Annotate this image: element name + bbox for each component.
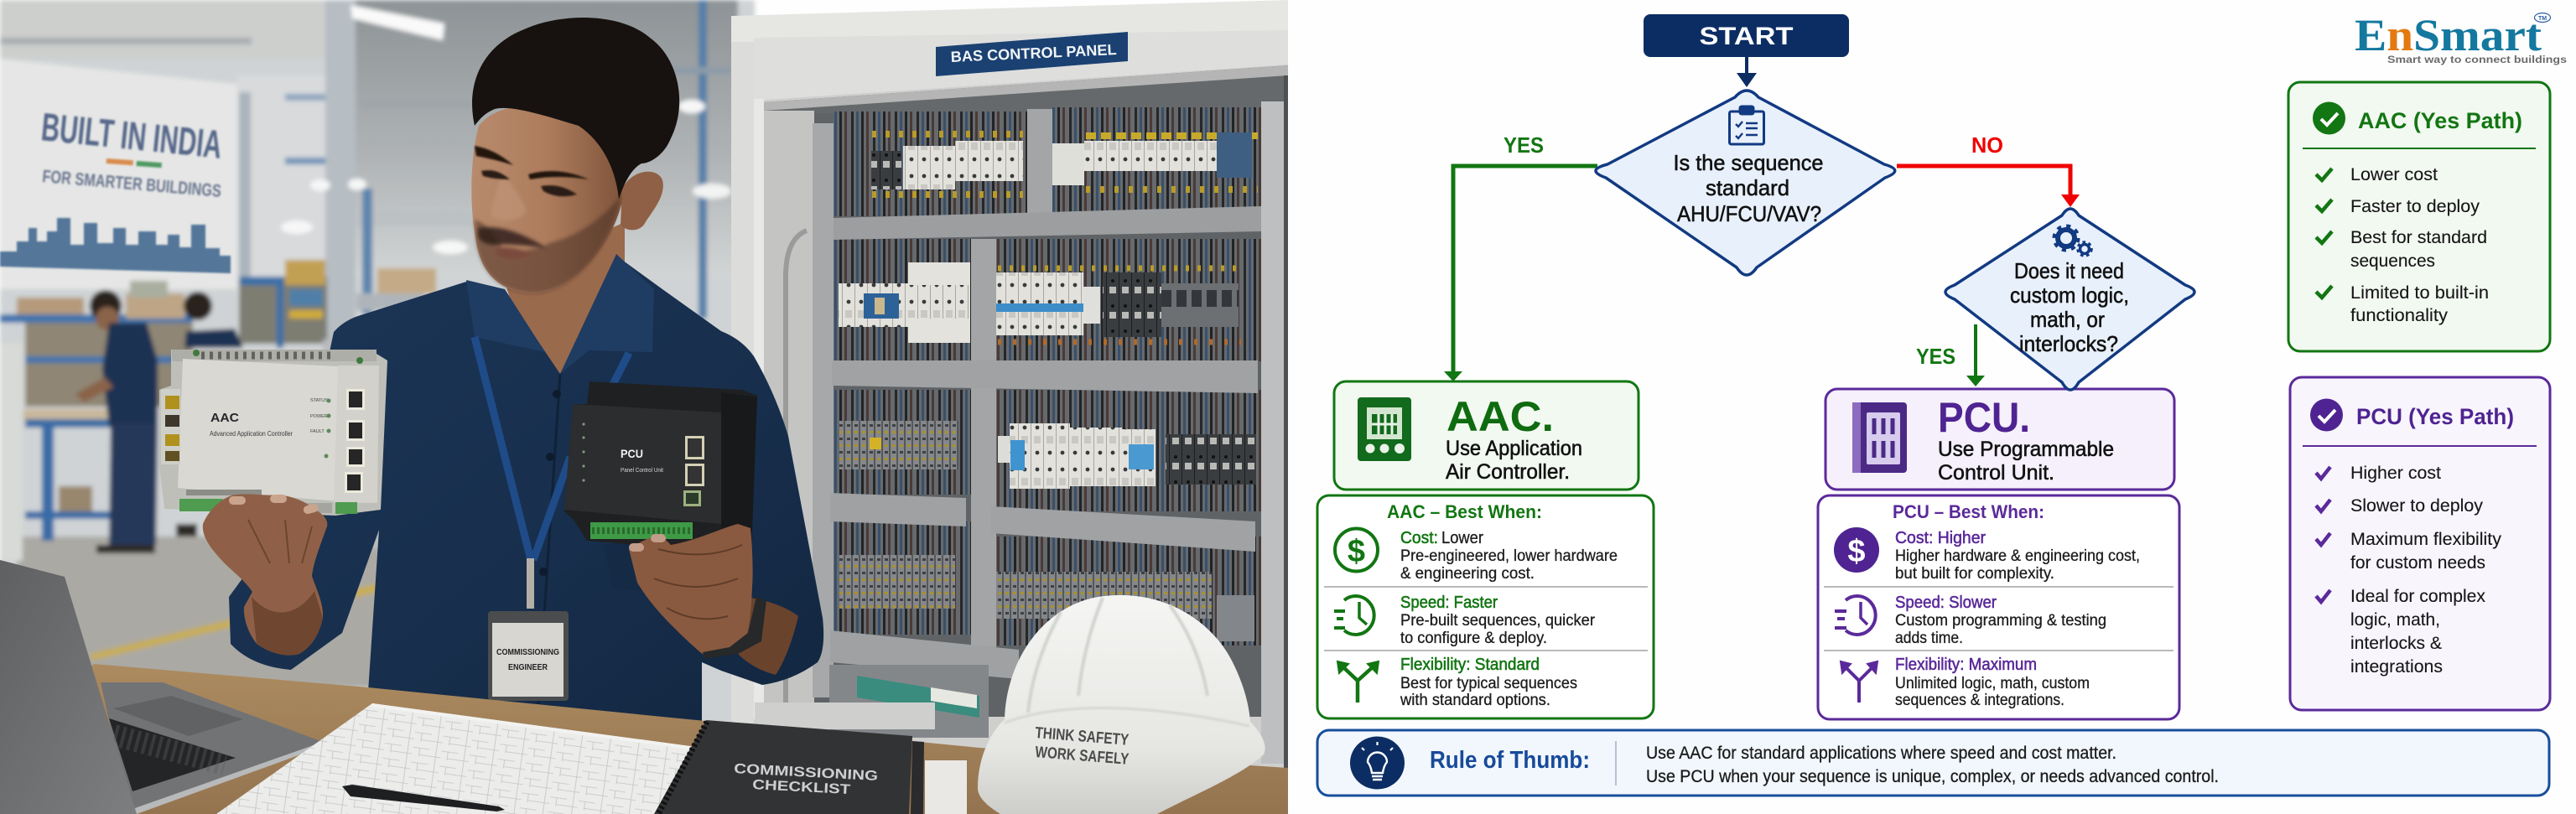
AAC controller device: STATUS: [310, 398, 328, 403]
panel: PCU best when: Cost: Higher: [1895, 529, 1986, 547]
panel: AAC best when: to configure & deploy.: [1400, 630, 1547, 647]
decision: is the sequence standard: standard: [1706, 175, 1789, 200]
brows and eyes: [475, 146, 589, 196]
icon: purple check badge: [2310, 399, 2343, 431]
panel: rule of thumb: [1317, 730, 2549, 796]
wall sign: Built in India: FOR SMARTER BUILDINGS: [42, 167, 222, 201]
decision: is the sequence standard: Is the sequence: [1674, 150, 1823, 175]
AAC controller device: AAC: [210, 411, 239, 425]
lanyard: [475, 337, 629, 560]
photo background: blurred factory interior: [0, 0, 755, 738]
ID badge: [488, 611, 569, 701]
hands and forearms: [203, 494, 798, 675]
icon: dollar: $: [1348, 534, 1365, 569]
panel: rule of thumb: Rule of Thumb:: [1430, 747, 1590, 774]
decision: custom logic needed: math, or: [2030, 307, 2105, 332]
panel: PCU yes path: [2290, 377, 2550, 710]
flowchart node: START: START: [1699, 23, 1793, 50]
label: YES (second): YES: [1916, 344, 1955, 369]
icon: green check badge: [2313, 102, 2345, 134]
panel: PCU best when: PCU – Best When:: [1893, 501, 2044, 522]
desk: [0, 664, 1288, 814]
hard hat: THINK SAFETY: [1035, 724, 1130, 749]
PCU controller device: Panel Control Unit: [621, 466, 664, 474]
panel: AAC best when: Speed: Faster: [1400, 594, 1498, 612]
control cabinet: [731, 0, 1288, 788]
background workers: [90, 290, 122, 322]
pen: [342, 785, 505, 811]
decision: custom logic needed: custom logic,: [2010, 283, 2129, 308]
icon: branching arrows: [1337, 661, 1379, 703]
ID badge: ENGINEER: [508, 662, 548, 672]
decision: custom logic needed: interlocks?: [2019, 331, 2118, 356]
blueprint drawing: [216, 703, 721, 814]
icon: clipboard checklist: [1729, 106, 1764, 144]
panel: AAC yes path: AAC (Yes Path): [2358, 108, 2522, 133]
panel: AAC best when: Flexibility: Standard: [1400, 656, 1540, 674]
checklist: AAC: Faster to deploy: [2350, 196, 2480, 216]
panel: PCU result: Use Programmable: [1938, 438, 2114, 461]
cabinet rails and shelves: [755, 75, 1288, 768]
checklist: PCU: integrations: [2350, 656, 2443, 677]
panel: AAC best when: Lower: [1441, 529, 1483, 547]
decision: custom logic needed: [1945, 209, 2194, 390]
panel: AAC best when: AAC – Best When:: [1387, 501, 1542, 522]
floor: [17, 537, 402, 687]
panel: PCU best when: Unlimited logic, math, custom: [1895, 675, 2090, 692]
panel: PCU best when: adds time.: [1895, 630, 1963, 647]
panel: rule of thumb: Use AAC for standard applications where speed and cost matter.: [1646, 744, 2116, 763]
arrow: no to second decision: [1897, 166, 2080, 207]
ID badge: COMMISSIONING: [496, 647, 559, 657]
hard hat: WORK SAFELY: [1035, 744, 1130, 769]
checklist: PCU: Maximum flexibility: [2350, 529, 2501, 549]
panel: PCU best when: Speed: Slower: [1895, 594, 1997, 612]
cabinet top label: [936, 32, 1128, 76]
wristwatch: [703, 597, 766, 659]
checklist: AAC: Limited to built-in: [2350, 283, 2489, 303]
PCU controller device: [564, 381, 757, 553]
shelves and boxes: [0, 314, 193, 323]
panel: AAC result: Use Application: [1446, 437, 1582, 460]
logo: EnSmart: EnSmart: [2355, 10, 2542, 60]
icon: gears: [2054, 226, 2091, 256]
panel: PCU best when: Custom programming & testing: [1895, 612, 2106, 630]
shirt: [229, 256, 823, 725]
ear: [621, 172, 663, 230]
panel: AAC best when: Best for typical sequences: [1400, 675, 1577, 692]
icon: dollar: [1335, 528, 1378, 572]
arrow: yes to AAC: [1444, 166, 1597, 381]
icon: light bulb: [1350, 736, 1405, 790]
checklist: AAC: [2316, 164, 2489, 325]
panel: AAC result: Air Controller.: [1446, 460, 1570, 484]
panel: PCU result: [1826, 389, 2174, 490]
AAC controller device: FAULT: [310, 429, 325, 434]
panel: AAC best when: Cost:: [1400, 529, 1438, 547]
notebook: commissioning checklist: [654, 720, 967, 814]
checklist: PCU: Slower to deploy: [2350, 495, 2483, 516]
cabinet top label: BAS CONTROL PANEL: [950, 41, 1117, 65]
label: NO: NO: [1971, 132, 2003, 158]
hard hat: [978, 595, 1265, 814]
checklist: AAC: Lower cost: [2350, 164, 2438, 184]
facial shading and stubble: [475, 172, 621, 293]
wall sign: Built in India: BUILT IN INDIA: [39, 104, 224, 167]
checklist: AAC: functionality: [2350, 305, 2448, 325]
checklist: PCU: for custom needs: [2350, 552, 2485, 573]
decision: is the sequence standard: [1596, 91, 1895, 275]
checklist: AAC: Best for standard: [2350, 227, 2487, 247]
notebook: commissioning checklist: CHECKLIST: [752, 777, 851, 797]
hair: [472, 18, 679, 200]
AAC controller device: Advanced Application Controller: [210, 430, 293, 438]
icon: clock: [1334, 596, 1374, 635]
checklist: PCU: [2316, 463, 2501, 677]
panel: PCU yes path: PCU (Yes Path): [2356, 404, 2514, 429]
arrow: start to first decision: [1737, 57, 1757, 87]
notebook: commissioning checklist: COMMISSIONING: [734, 761, 878, 784]
panel: rule of thumb: Use PCU when your sequence is unique, complex, or needs advanced control.: [1646, 767, 2219, 786]
decision: is the sequence standard: AHU/FCU/VAV?: [1677, 201, 1821, 226]
checklist: PCU: Ideal for complex: [2350, 586, 2485, 606]
panel: PCU best when: but built for complexity.: [1895, 565, 2054, 583]
wiring compartments: [834, 107, 1262, 645]
decision: custom logic needed: Does it need: [2014, 258, 2124, 283]
icon: clock purple: [1835, 596, 1876, 635]
label: YES: YES: [1504, 132, 1544, 158]
panel: AAC best when: Pre-engineered, lower hardware: [1400, 547, 1618, 565]
logo: EnSmart: TM: [2538, 16, 2547, 22]
panel: AAC best when: with standard options.: [1400, 692, 1550, 709]
panel: AAC yes path: [2288, 82, 2550, 351]
checklist: PCU: Higher cost: [2350, 463, 2441, 483]
panel: PCU best when: Higher hardware & engineering cost,: [1895, 547, 2140, 565]
panel: AAC best when: Pre-built sequences, quicker: [1400, 612, 1596, 630]
flowchart node: START: [1644, 14, 1849, 57]
PCU controller device: PCU: [621, 447, 643, 460]
icon: PCU controller: [1852, 402, 1907, 473]
checklist: PCU: logic, math,: [2350, 609, 2440, 630]
AAC controller device: POWER: [310, 414, 328, 419]
icon: branching arrows purple: [1841, 661, 1877, 703]
laptop: [0, 560, 324, 814]
AAC controller device: [159, 350, 387, 516]
panel: PCU best when: Flexibility: Maximum: [1895, 656, 2037, 674]
panel: PCU best when: sequences & integrations.: [1895, 692, 2064, 709]
icon: AAC controller: [1358, 397, 1411, 461]
panel: AAC result: AAC.: [1446, 393, 1554, 440]
engineer: [229, 18, 823, 725]
face: [471, 106, 623, 293]
arrow: yes to PCU: [1966, 324, 1985, 386]
panel: AAC best when: & engineering cost.: [1400, 565, 1535, 583]
wall sign: Built in India: [0, 104, 231, 273]
logo: EnSmart: Smart way to connect buildings: [2387, 55, 2567, 65]
panel: PCU result: PCU.: [1938, 394, 2030, 441]
panel: PCU best when: [1818, 495, 2179, 719]
panel: photo of commissioning engineer with AAC and PCU controllers: [0, 0, 1288, 814]
panel: AAC result: [1334, 381, 1639, 490]
checklist: PCU: interlocks &: [2350, 633, 2442, 653]
icon: dollar filled: $: [1847, 534, 1866, 569]
neck: [503, 222, 646, 377]
panel: AAC best when: [1317, 495, 1654, 718]
breakers and terminal blocks: [839, 132, 1258, 641]
icon: dollar filled: [1834, 527, 1879, 573]
panel: PCU result: Control Unit.: [1938, 461, 2054, 485]
checklist: AAC: sequences: [2350, 251, 2435, 271]
